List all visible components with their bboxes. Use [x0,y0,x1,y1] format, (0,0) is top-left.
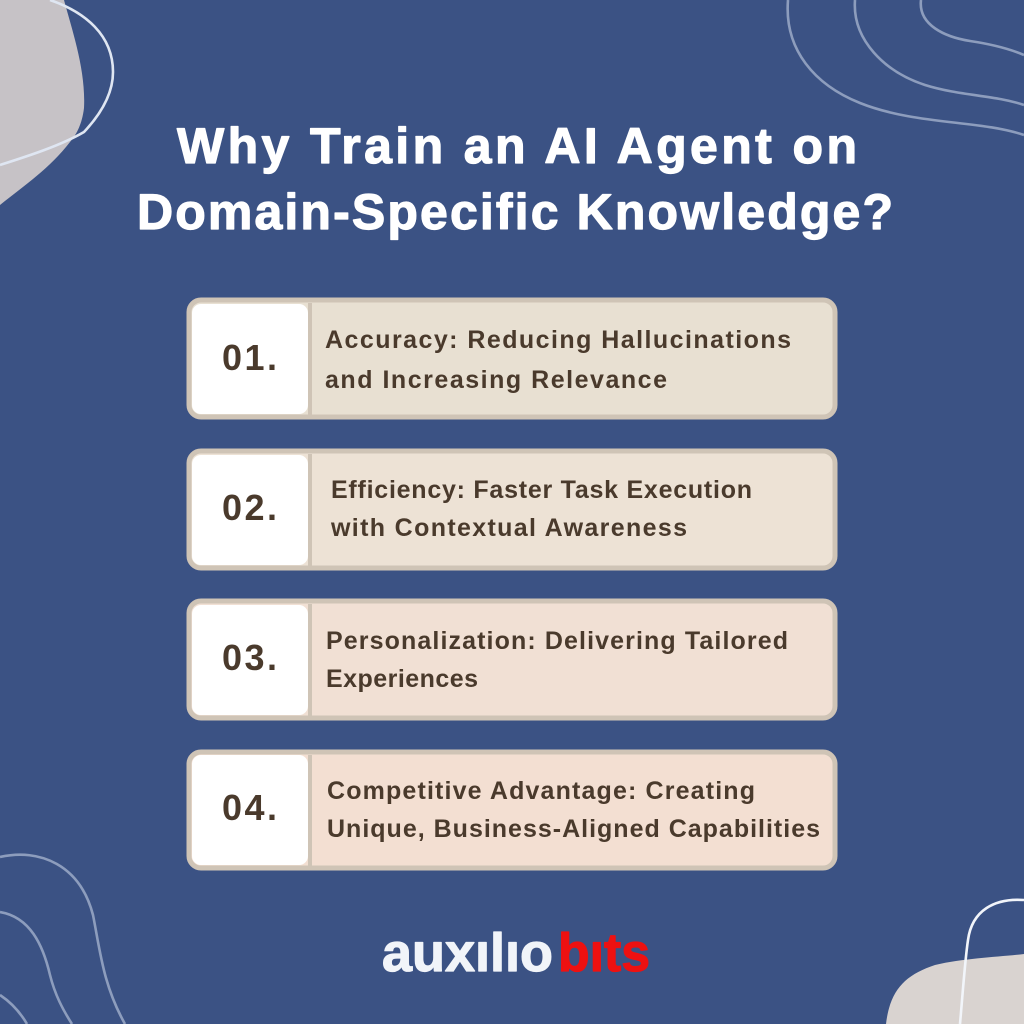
logo: auxılıo [382,923,553,983]
logo: bıts [558,923,650,983]
card 03: 03. [222,637,277,678]
top-left blob with outline [0,0,113,205]
card 02: Efficiency: Faster Task Execution [331,476,752,504]
card 04: Competitive Advantage: Creating [327,777,755,805]
logo [382,923,650,983]
card 03: Experiences [326,665,478,693]
card 02 [189,451,835,568]
title: Domain-Specific Knowledge? [137,184,893,240]
card 04 [189,752,835,868]
title: Why Train an AI Agent on [177,118,857,174]
title [137,118,893,240]
card 03 [189,601,835,718]
card 01: Accuracy: Reducing Hallucinations [325,326,791,354]
card 04: Unique, Business-Aligned Capabilities [327,815,820,843]
card 02: 02. [222,487,277,528]
bottom-right blob with outline [886,900,1024,1024]
top-right contour lines [788,0,1024,135]
card 01: and Increasing Relevance [325,366,667,394]
bottom-left contour lines [0,855,125,1024]
card 02: with Contextual Awareness [330,514,687,542]
card 03: Personalization: Delivering Tailored [326,627,788,655]
card 01: 01. [222,337,277,378]
card 01 [189,300,835,417]
card 04: 04. [222,787,277,828]
